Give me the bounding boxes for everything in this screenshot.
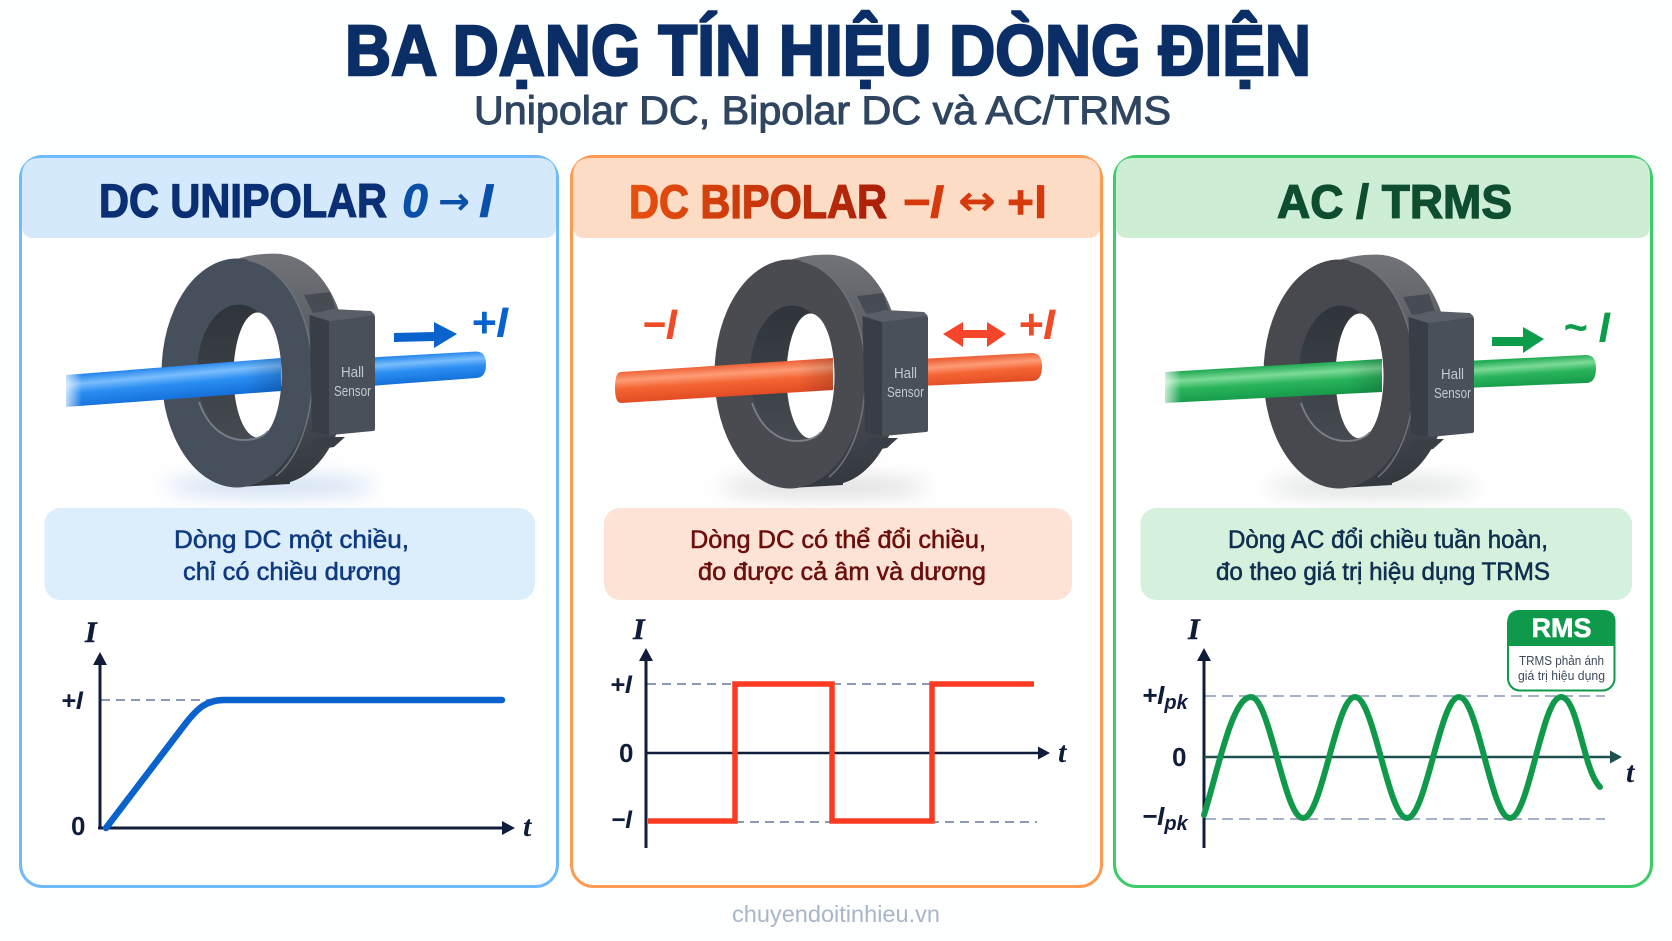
- illustration: blue conductor through Hall sensor ring: Hall: [341, 364, 364, 381]
- chart: AC sine wave: 0: [1172, 742, 1186, 772]
- panel heading band: DC bipolar: [573, 158, 1100, 238]
- chart: bipolar square wave: [610, 613, 1068, 848]
- chart: AC sine wave: +I: [1142, 680, 1164, 710]
- heading: DC unipolar: DC UNIPOLAR: [99, 174, 387, 227]
- chart: bipolar square wave: 0: [619, 738, 633, 768]
- description box: [1140, 508, 1632, 600]
- chart: bipolar square wave: I: [632, 613, 646, 646]
- illustration: blue conductor through Hall sensor ring: Sensor: [334, 383, 371, 400]
- heading: DC unipolar: →: [438, 179, 470, 223]
- chart: AC sine wave: t: [1626, 756, 1636, 789]
- chart: AC sine wave: pk: [1163, 692, 1189, 714]
- chart: bipolar square wave: +I: [610, 671, 633, 699]
- callout: RMS: RMS: [1532, 613, 1592, 643]
- description box: Dòng DC một chiều,: [174, 526, 409, 554]
- heading: DC bipolar: [629, 175, 1047, 228]
- illustration: green conductor through Hall sensor ring: [1159, 255, 1611, 497]
- chart: AC sine wave: −I: [1142, 801, 1164, 831]
- panel: AC / TRMS: [1114, 156, 1652, 886]
- chart: unipolar ramp: t: [523, 810, 533, 843]
- chart: bipolar square wave: −I: [611, 806, 633, 834]
- chart: unipolar ramp: I: [84, 616, 98, 649]
- panel heading band: DC unipolar: [22, 158, 556, 238]
- chart: unipolar ramp: [61, 616, 533, 843]
- chart: AC sine wave: [1142, 610, 1636, 848]
- panel heading band: AC / TRMS: [1116, 158, 1650, 238]
- chart: unipolar ramp: +I: [61, 687, 84, 715]
- arrow: bidirectional current: [943, 322, 1006, 347]
- chart: unipolar ramp: 0: [71, 811, 85, 841]
- chart: AC sine wave: pk: [1163, 813, 1189, 835]
- heading: DC unipolar: I: [479, 174, 494, 227]
- arrow: current direction: [1492, 327, 1544, 353]
- illustration: orange conductor through Hall sensor ring: Sensor: [887, 384, 924, 401]
- positive current label: +I: [1018, 301, 1056, 349]
- heading: DC bipolar: DC BIPOLAR: [629, 175, 887, 228]
- callout: RMS: TRMS phản ánh: [1519, 654, 1604, 668]
- current label: ~ I: [1563, 304, 1611, 352]
- description box: đo được cả âm và dương: [698, 558, 986, 586]
- callout: RMS: giá trị hiệu dụng: [1518, 669, 1605, 683]
- illustration: green conductor through Hall sensor ring: Sensor: [1434, 385, 1471, 402]
- description box: Dòng AC đổi chiều tuần hoàn,: [1228, 526, 1548, 554]
- description box: Dòng DC có thể đổi chiều,: [690, 526, 986, 554]
- chart: AC sine wave: I: [1187, 613, 1201, 646]
- heading: DC bipolar: +I: [1007, 175, 1047, 228]
- footer: website: chuyendoitinhieu.vn: [732, 901, 940, 927]
- chart: bipolar square wave: t: [1058, 736, 1068, 769]
- illustration: green conductor through Hall sensor ring: Hall: [1441, 366, 1464, 383]
- illustration: orange conductor through Hall sensor ring: Hall: [894, 365, 917, 382]
- heading: DC bipolar: ↔: [958, 176, 996, 225]
- panel: DC bipolar: [572, 156, 1102, 886]
- subtitle: Unipolar DC, Bipolar DC và AC/TRMS: [474, 89, 1171, 133]
- current label: +I: [471, 299, 509, 347]
- illustration: blue conductor through Hall sensor ring: [60, 254, 509, 496]
- illustration: orange conductor through Hall sensor ring: [615, 255, 1056, 497]
- negative current label: −I: [642, 301, 678, 349]
- description box: chỉ có chiều dương: [183, 558, 401, 586]
- arrow: current direction: [394, 322, 457, 348]
- description box: [604, 508, 1072, 600]
- callout: RMS: [1508, 610, 1616, 690]
- heading: AC / TRMS: AC / TRMS: [1277, 175, 1512, 228]
- description box: [44, 508, 535, 600]
- description box: đo theo giá trị hiệu dụng TRMS: [1216, 558, 1550, 586]
- heading: DC unipolar: 0: [402, 174, 428, 227]
- title: BA DẠNG TÍN HIỆU DÒNG ĐIỆN: [345, 11, 1311, 91]
- panel: DC unipolar: [20, 156, 558, 886]
- heading: DC bipolar: −I: [902, 175, 944, 228]
